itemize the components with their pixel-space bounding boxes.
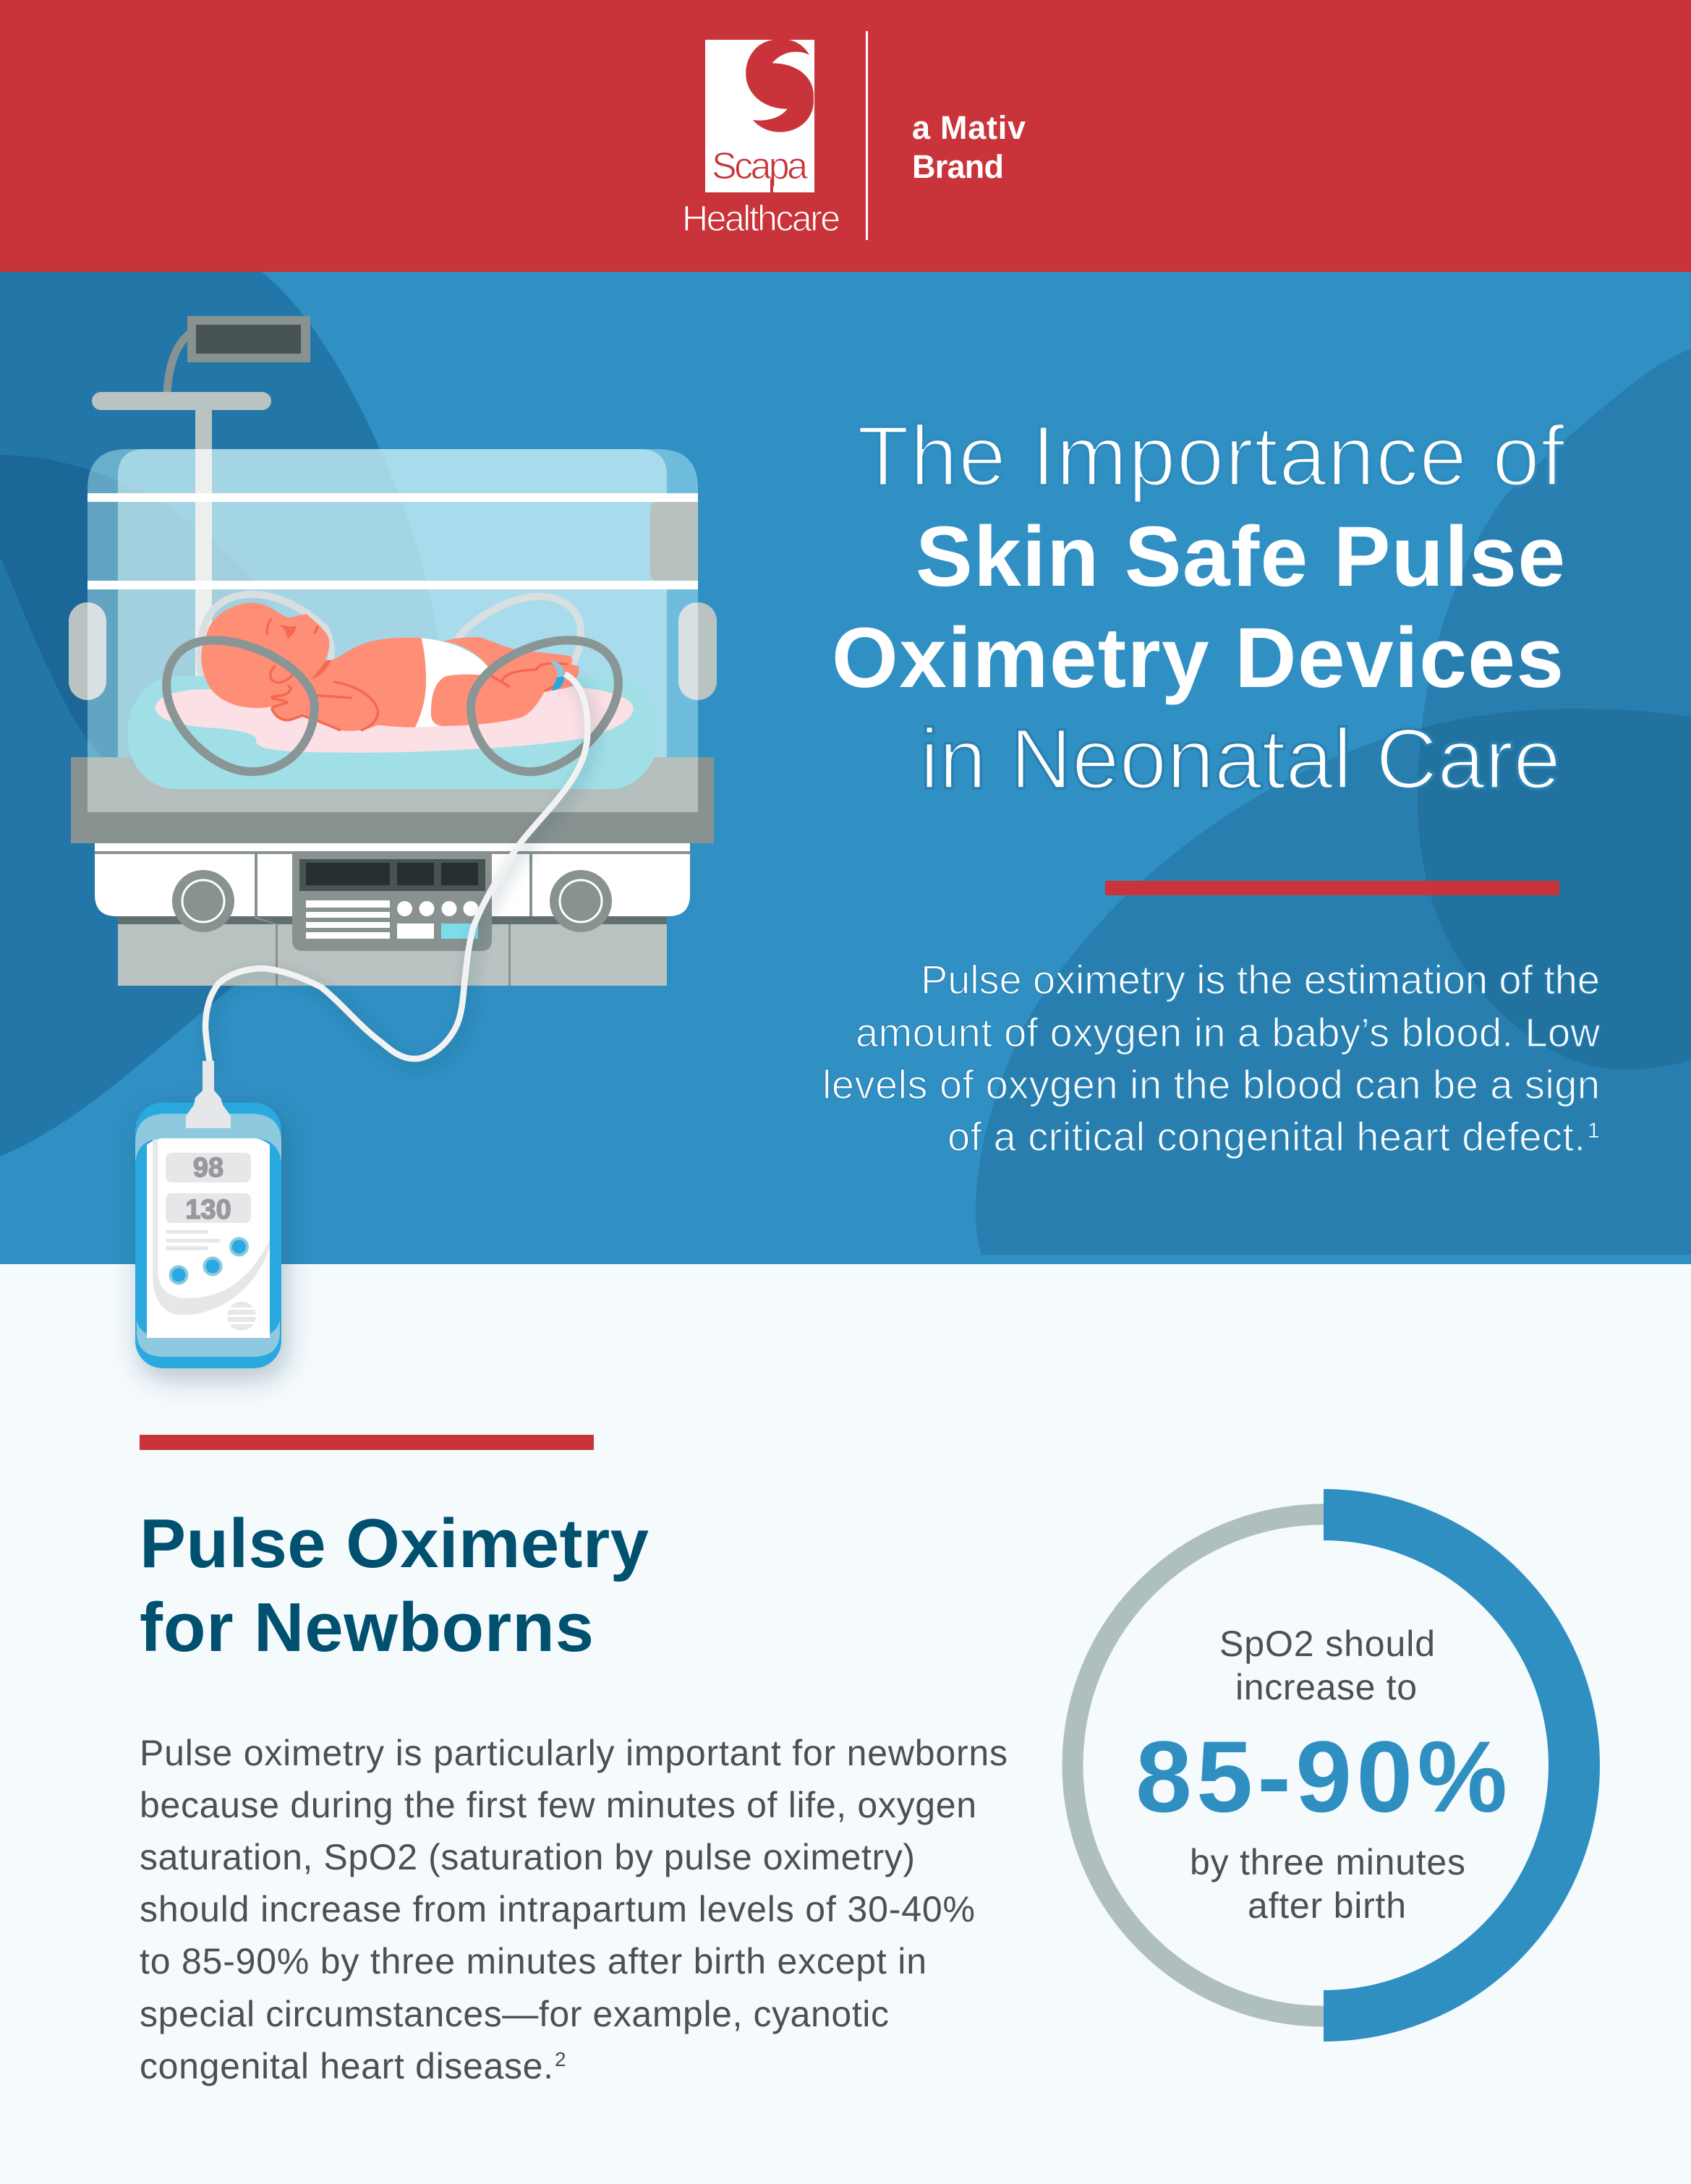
panel: hero background: [0, 272, 1691, 1264]
section heading: Pulse Oximetry: [140, 1505, 649, 1582]
intro paragraph: [822, 957, 1601, 1159]
reading: 98: [166, 1153, 251, 1183]
reading: 98: 98: [193, 1153, 223, 1183]
right knob: [550, 870, 612, 932]
title accent bar: [1105, 881, 1559, 895]
donut chart: SpO2 target: [1073, 1514, 1574, 2016]
body paragraph: saturation, SpO2 (saturation by pulse oximetry): [140, 1837, 915, 1877]
donut label: increase to: [1235, 1667, 1417, 1707]
light access hoops: [200, 594, 581, 676]
pole inside canopy: [195, 449, 212, 676]
body paragraph: [140, 1733, 1008, 2086]
intro paragraph: levels of oxygen in the blood can be a sign: [822, 1062, 1600, 1107]
neck shadow: [310, 660, 331, 680]
inner glass canopy: [118, 449, 667, 757]
device text lines: [166, 1230, 221, 1250]
eye mark: [278, 624, 297, 639]
intro paragraph: 1: [1588, 1119, 1600, 1143]
title: [832, 409, 1565, 807]
illustration: incubator: [69, 316, 717, 986]
device body: [135, 1103, 281, 1368]
canopy rails: [88, 493, 698, 589]
baby body: [201, 602, 579, 731]
overhead monitor: [187, 316, 310, 362]
donut track: [1073, 1514, 1324, 2016]
body paragraph: to 85-90% by three minutes after birth except in: [140, 1941, 927, 1982]
title: The Importance of: [857, 409, 1564, 504]
logo: Scapa Healthcare: Scapa: [712, 145, 808, 187]
intro paragraph: amount of oxygen in a baby’s blood. Low: [856, 1010, 1601, 1055]
intro paragraph: of a critical congenital heart defect.: [947, 1114, 1585, 1159]
tray and pole: [92, 392, 271, 451]
incubator base slab: [71, 757, 714, 843]
divider line: [866, 31, 868, 240]
illustration: handheld pulse oximeter: [135, 1061, 281, 1368]
logo: Scapa Healthcare: Healthcare: [682, 198, 840, 239]
body paragraph: 2: [555, 2048, 566, 2070]
section heading: for Newborns: [140, 1589, 594, 1666]
white drawer panel: [95, 843, 690, 924]
control panel: [292, 854, 492, 951]
sensor cable: [205, 674, 587, 1063]
swoosh: [153, 1139, 270, 1315]
title: Skin Safe Pulse: [916, 509, 1565, 605]
donut label: SpO2 should: [1219, 1624, 1435, 1664]
body paragraph: special circumstances—for example, cyanotic: [140, 1994, 889, 2034]
brand note: a Mativ: [912, 109, 1026, 146]
canopy base ledge: [88, 757, 698, 812]
bottom band: [137, 1321, 280, 1357]
lower base cabinet: [118, 916, 667, 986]
speaker grille: [226, 1302, 257, 1331]
access port hoops: [166, 640, 618, 772]
oximeter sensor on foot: [550, 661, 565, 691]
section accent bar: [140, 1435, 594, 1450]
intro paragraph: Pulse oximetry is the estimation of the: [921, 957, 1600, 1002]
donut label: by three minutes: [1190, 1842, 1465, 1882]
baby contour lines: [267, 619, 566, 730]
brand note: [912, 109, 1026, 185]
left handle: [69, 602, 106, 700]
monitor arm: [167, 334, 189, 394]
body paragraph: because during the first few minutes of life, oxygen: [140, 1785, 976, 1825]
donut label: [1136, 1624, 1507, 1926]
title: Oximetry Devices: [832, 610, 1564, 706]
cable connector: [186, 1061, 231, 1128]
section heading: [140, 1505, 649, 1666]
right handle: [678, 602, 717, 700]
screen face: [147, 1138, 270, 1338]
body paragraph: congenital heart disease.: [140, 2046, 553, 2086]
donut progress arc: [1324, 1514, 1574, 2016]
reading: 130: 130: [185, 1195, 231, 1225]
body paragraph: should increase from intrapartum levels of 30-40%: [140, 1889, 975, 1929]
title: in Neonatal Care: [920, 712, 1561, 807]
device buttons: [171, 1238, 247, 1283]
logo: Scapa Healthcare: [682, 40, 840, 239]
donut label: after birth: [1248, 1885, 1406, 1926]
panel: header banner: [0, 0, 1691, 272]
side gray panel: [650, 502, 698, 581]
brand note: Brand: [912, 148, 1004, 185]
top band: [135, 1114, 281, 1162]
outer glass canopy: [88, 449, 698, 812]
mattress and blanket: [127, 676, 659, 789]
donut label: 85-90%: [1136, 1720, 1507, 1833]
baby: [200, 594, 581, 731]
reading: 130: [166, 1193, 251, 1225]
left knob: [172, 870, 234, 932]
body paragraph: Pulse oximetry is particularly important for newborns: [140, 1733, 1008, 1773]
